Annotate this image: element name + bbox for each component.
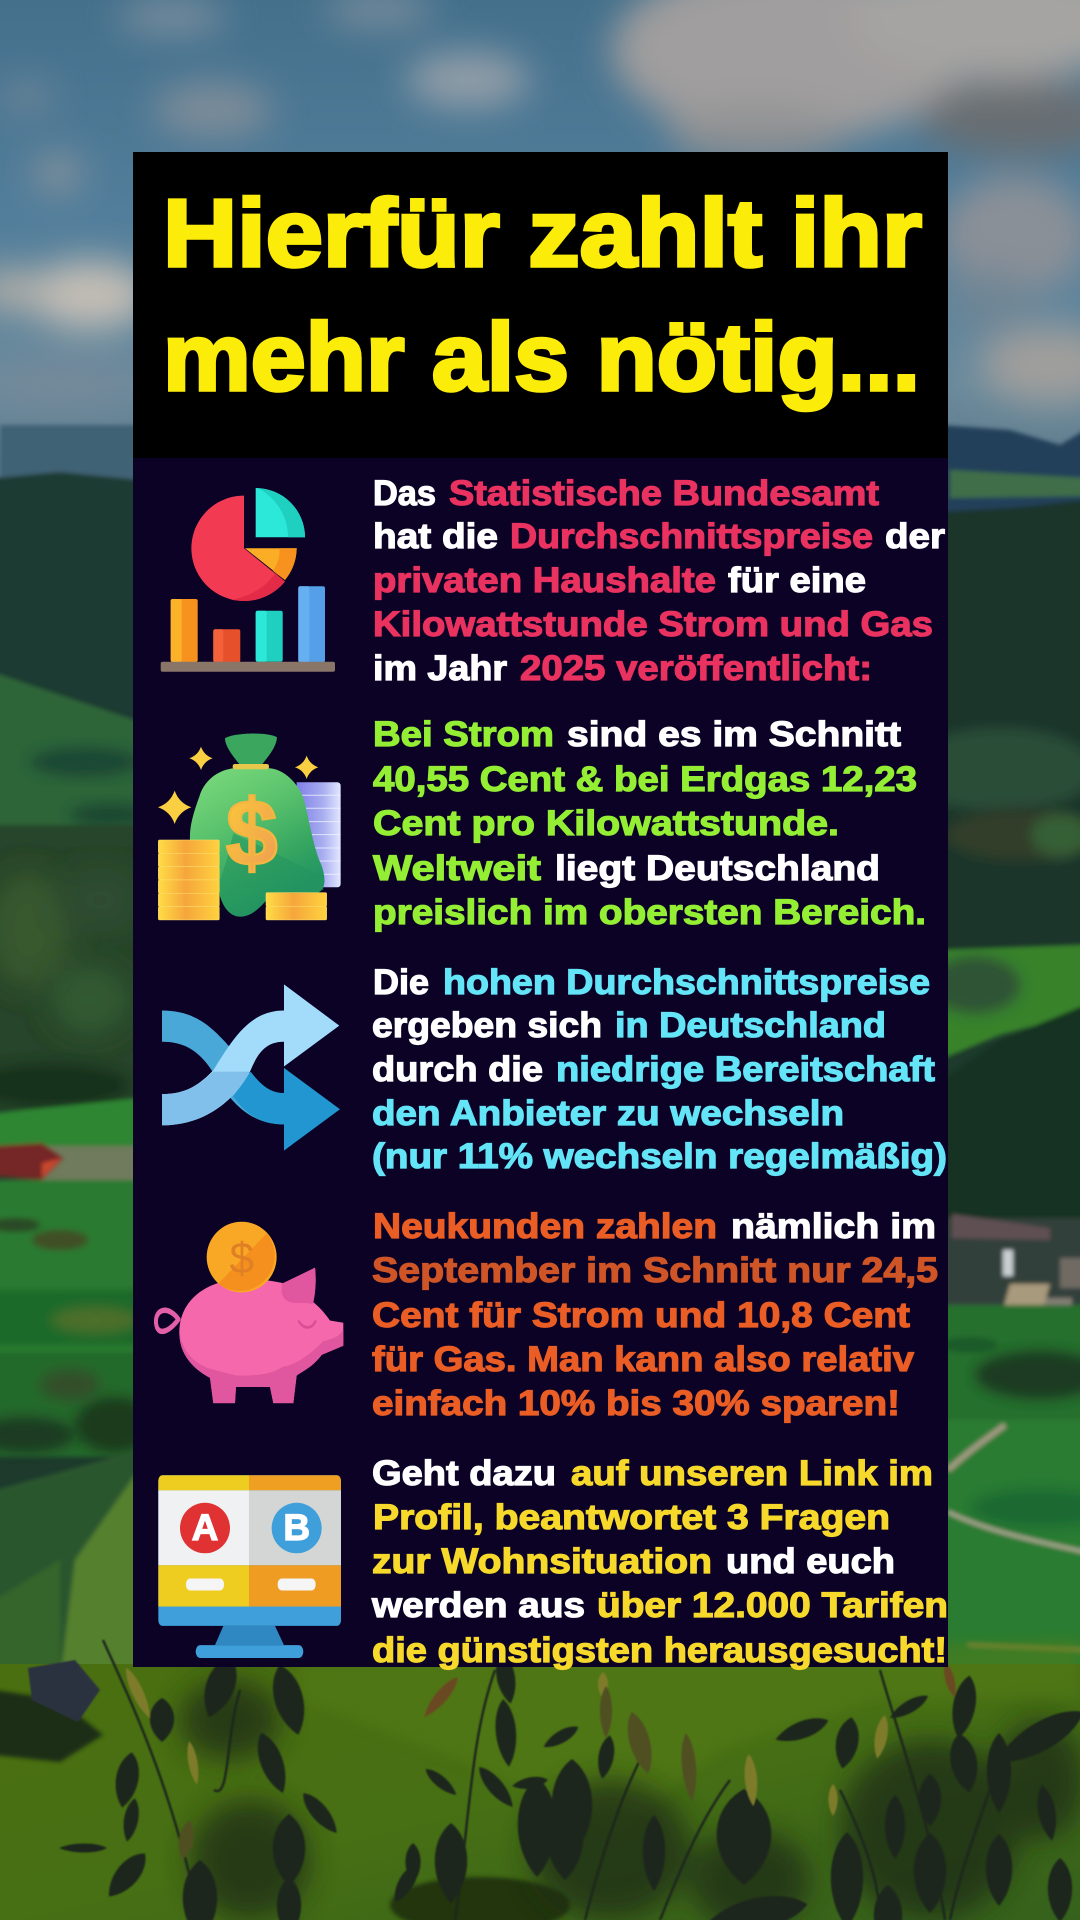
- text block: Statistisches Bundesamt: Das: [373, 474, 436, 513]
- text block: Strom- und Gaspreise: liegt Deutschland: [555, 849, 880, 888]
- text block: Neukundenpreise: [372, 1207, 938, 1423]
- foreground meadow: [0, 1640, 1080, 1920]
- icon: money bag with coins: $: [226, 781, 278, 885]
- text block: Neukundenpreise: September im Schnitt nur 24,5: [372, 1251, 938, 1290]
- text block: Link im Profil: die günstigsten herausgesucht!: [372, 1631, 947, 1670]
- text block: niedrige Wechselbereitschaft: ergeben sich: [372, 1006, 602, 1045]
- text block: niedrige Wechselbereitschaft: [372, 963, 947, 1176]
- icon: piggy bank with coin: $: [229, 1234, 254, 1283]
- text block: niedrige Wechselbereitschaft: durch die: [372, 1050, 543, 1089]
- text block: Strom- und Gaspreise: Cent pro Kilowattstunde.: [373, 804, 839, 843]
- text block: Statistisches Bundesamt: für eine: [728, 561, 866, 600]
- text block: Statistisches Bundesamt: der: [885, 517, 945, 556]
- text block: Neukundenpreise: Neukunden zahlen: [373, 1207, 717, 1246]
- text block: Statistisches Bundesamt: Kilowattstunde Strom und Gas: [373, 605, 933, 644]
- text block: Strom- und Gaspreise: preislich im obersten Bereich.: [373, 893, 926, 932]
- text block: Link im Profil: [371, 1454, 948, 1670]
- text block: Statistisches Bundesamt: 2025 veröffentlicht:: [520, 649, 872, 688]
- panel: title header: [133, 152, 948, 458]
- title: [163, 180, 922, 411]
- icon: pie and bar chart: [161, 488, 335, 672]
- text block: Link im Profil: Geht dazu: [372, 1454, 556, 1493]
- icon: money bag with coins: [158, 734, 341, 920]
- text block: Neukundenpreise: nämlich im: [731, 1207, 936, 1246]
- text block: Neukundenpreise: Cent für Strom und 10,8 Cent: [372, 1296, 910, 1335]
- text block: Strom- und Gaspreise: sind es im Schnitt: [567, 715, 901, 754]
- text block: Statistisches Bundesamt: hat die: [373, 517, 498, 556]
- title: Hierfür zahlt ihr: [163, 180, 922, 287]
- text block: Link im Profil: zur Wohnsituation: [372, 1542, 712, 1581]
- text block: Statistisches Bundesamt: privaten Haushalte: [373, 561, 716, 600]
- text block: Statistisches Bundesamt: Durchschnittspreise: [510, 517, 873, 556]
- text block: Link im Profil: und euch: [726, 1542, 895, 1581]
- text block: Link im Profil: auf unseren Link im: [571, 1454, 933, 1493]
- text block: Strom- und Gaspreise: [373, 715, 926, 932]
- plant silhouettes: [59, 1640, 1080, 1920]
- text block: Link im Profil: über 12.000 Tarifen: [597, 1586, 948, 1625]
- text block: Neukundenpreise: für Gas. Man kann also relativ: [372, 1340, 915, 1379]
- left strip hills and fields: [0, 425, 155, 1680]
- text block: niedrige Wechselbereitschaft: hohen Durchschnittspreise: [443, 963, 930, 1002]
- text block: Strom- und Gaspreise: Bei Strom: [373, 715, 554, 754]
- text block: niedrige Wechselbereitschaft: Die: [373, 963, 429, 1002]
- text block: Statistisches Bundesamt: [373, 474, 945, 688]
- text block: Strom- und Gaspreise: 40,55 Cent & bei Erdgas 12,23: [373, 760, 917, 799]
- text block: niedrige Wechselbereitschaft: (nur 11% wechseln regelmäßig): [372, 1137, 947, 1176]
- panel: content: [133, 458, 948, 1670]
- icon: A/B comparison monitor: A: [192, 1507, 218, 1548]
- text block: Statistisches Bundesamt: im Jahr: [373, 649, 507, 688]
- text block: Link im Profil: Profil, beantwortet 3 Fragen: [373, 1498, 890, 1537]
- sky with clouds: [0, 0, 1080, 480]
- text block: Neukundenpreise: einfach 10% bis 30% sparen!: [372, 1384, 900, 1423]
- text block: Statistisches Bundesamt: Statistische Bundesamt: [449, 474, 879, 513]
- text block: Link im Profil: werden aus: [371, 1586, 585, 1625]
- icon: piggy bank with coin: [156, 1222, 343, 1403]
- text block: niedrige Wechselbereitschaft: in Deutschland: [615, 1006, 886, 1045]
- text block: Strom- und Gaspreise: Weltweit: [373, 849, 541, 888]
- icon: A/B comparison monitor: [158, 1475, 341, 1658]
- icon: A/B comparison monitor: B: [283, 1507, 310, 1548]
- text block: niedrige Wechselbereitschaft: den Anbieter zu wechseln: [372, 1094, 844, 1133]
- title: mehr als nötig...: [163, 304, 920, 411]
- right strip hills, farm and fields: [905, 425, 1080, 1680]
- text block: niedrige Wechselbereitschaft: niedrige Bereitschaft: [556, 1050, 935, 1089]
- icon: shuffle arrows: [162, 984, 340, 1151]
